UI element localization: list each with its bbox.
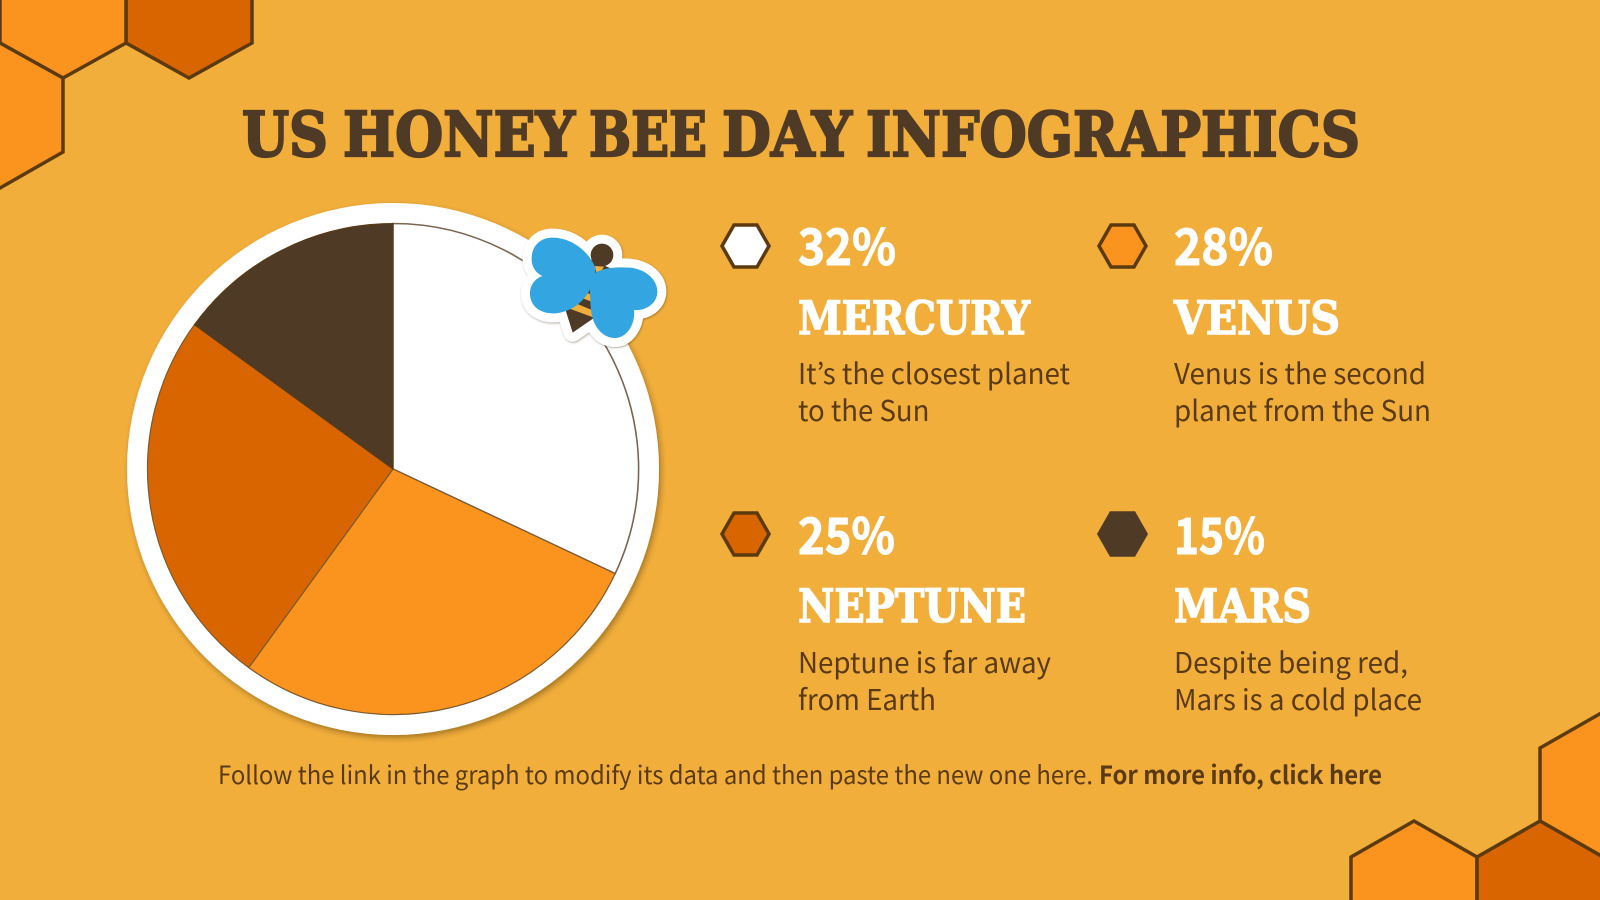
description: planet from the Sun <box>1174 389 1431 430</box>
icon: white hexagon <box>722 225 769 267</box>
icon: dark orange hexagon <box>722 513 769 555</box>
name: NEPTUNE <box>798 579 1026 633</box>
slice: Mercury 32% <box>393 223 639 574</box>
pie chart <box>127 203 659 735</box>
title <box>242 98 1360 171</box>
legend item: Neptune <box>722 497 1051 719</box>
slice: Neptune 25% <box>148 325 393 668</box>
title: INFOGRAPHICS <box>866 98 1360 171</box>
percentage: 15% <box>1174 497 1265 569</box>
description <box>1174 641 1422 719</box>
description: from Earth <box>798 678 936 719</box>
bee wings <box>530 238 657 338</box>
title: HONEY <box>343 98 576 171</box>
sticker white outline <box>530 238 657 338</box>
percentage: 25% <box>798 497 895 569</box>
footer instruction: Follow the link in the graph to modify its data and then paste the new one here. <box>218 756 1093 792</box>
icon: brown hexagon <box>1099 513 1146 555</box>
slice: Venus 28% <box>249 469 615 715</box>
title: BEE <box>589 98 707 171</box>
icon: bee sticker <box>530 238 657 338</box>
description <box>798 352 1070 430</box>
legend item: Venus <box>1099 208 1431 430</box>
icon: orange hexagon <box>1099 225 1146 267</box>
legend item: Mars <box>1099 497 1422 719</box>
honeycomb: bottom-right corner <box>1351 712 1600 900</box>
description <box>1174 352 1431 430</box>
description: Despite being red, <box>1174 641 1408 682</box>
bee body <box>565 244 613 333</box>
footer note <box>218 756 1382 792</box>
title: DAY <box>722 98 853 171</box>
description <box>798 641 1051 719</box>
legend item: Mercury <box>722 208 1070 430</box>
percentage: 32% <box>798 208 896 280</box>
percentage: 28% <box>1174 208 1273 280</box>
slice: Mars 15% <box>194 224 393 469</box>
description: to the Sun <box>798 389 930 430</box>
pie backing disc <box>127 203 659 735</box>
name: MARS <box>1174 579 1311 633</box>
name: VENUS <box>1173 291 1340 345</box>
description: Venus is the second <box>1174 352 1426 393</box>
description: Mars is a cold place <box>1174 678 1422 719</box>
footer link: For more info, click here <box>1099 756 1382 792</box>
title: US <box>242 98 328 171</box>
description: Neptune is far away <box>798 641 1051 682</box>
name: MERCURY <box>798 291 1031 345</box>
description: It’s the closest planet <box>798 352 1070 393</box>
honeycomb: top-left corner <box>0 0 252 188</box>
